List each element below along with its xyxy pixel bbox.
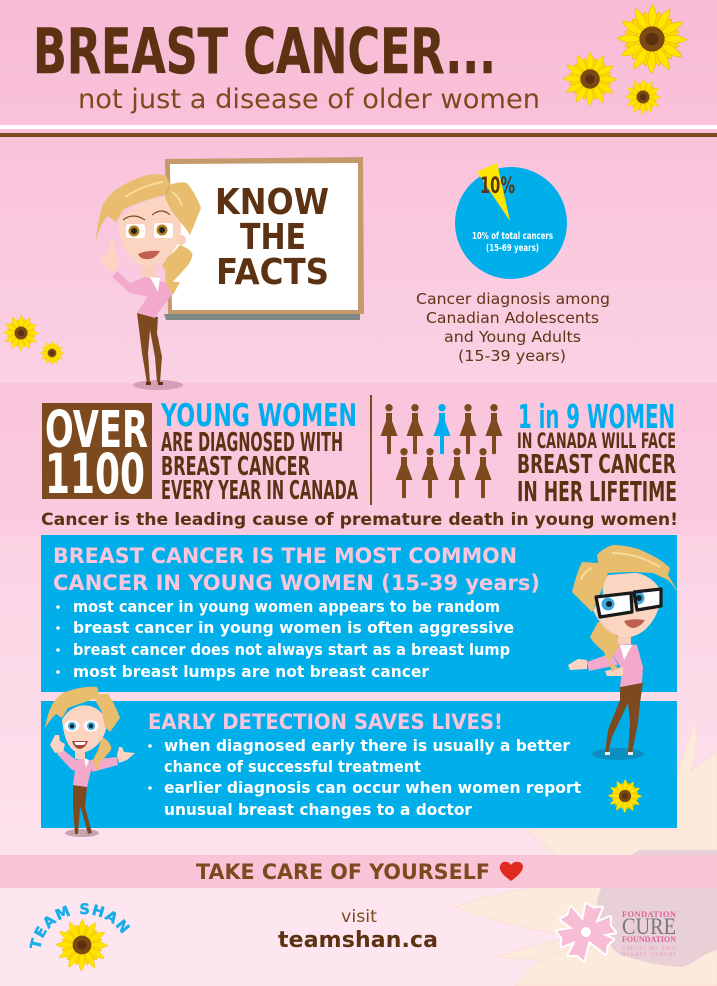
header divider lines	[0, 125, 717, 137]
stat text: young women: ARE DIAGNOSED WITH	[161, 428, 343, 458]
stat: over 1100: 1100	[45, 442, 145, 506]
left sunflowers	[3, 315, 64, 365]
pie chart: 10%: 10% of total cancers	[472, 231, 553, 242]
stat text: young women	[160, 398, 358, 506]
whiteboard heading: KNOW	[215, 182, 329, 223]
band: take care of yourself	[0, 855, 717, 888]
panel bullets: most cancer in young women appears to be random	[73, 597, 500, 616]
panel heading: EARLY DETECTION SAVES LIVES!	[148, 710, 503, 734]
vertical divider	[370, 395, 372, 505]
panel heading: BREAST CANCER IS THE MOST COMMON	[53, 544, 517, 568]
stat: over 1100: OVER	[45, 401, 148, 460]
call to action: visit: visit	[341, 907, 377, 927]
pie caption	[416, 290, 610, 365]
logo: team shan	[29, 903, 130, 971]
panel heading	[53, 544, 540, 595]
subtitle: not just a disease of older women	[78, 84, 540, 115]
logo: team shan: TEAM SHAN	[29, 903, 130, 948]
character: presenter pointing up	[96, 174, 201, 390]
pie caption: (15-39 years)	[458, 347, 566, 365]
icon: heart	[500, 862, 523, 881]
panel bullets: unusual breast changes to a doctor	[164, 800, 472, 819]
whiteboard heading	[215, 182, 329, 293]
panel sunflower	[608, 779, 642, 813]
header sunflowers	[563, 4, 687, 115]
panel bullets	[148, 736, 581, 819]
panel bullets: earlier diagnosis can occur when women report	[164, 778, 581, 797]
panel bullets: when diagnosed early there is usually a better	[164, 736, 570, 755]
band: take care of yourself: TAKE CARE OF YOURSELF	[196, 860, 490, 884]
panel bullets: chance of successful treatment	[164, 757, 421, 776]
logo: cure foundation: breast cancer	[622, 951, 677, 958]
stat: over 1100	[42, 401, 152, 506]
title: BREAST CANCER...	[33, 15, 496, 88]
panel: early detection	[41, 701, 677, 828]
panel bullets: breast cancer does not always start as a breast lump	[73, 640, 510, 659]
pie caption: Canadian Adolescents	[426, 309, 599, 327]
stat text: young women: BREAST CANCER	[161, 452, 310, 482]
logo: cure foundation: FONDATION	[622, 909, 677, 919]
whiteboard: know the facts	[164, 157, 364, 320]
logo: cure foundation: FOUNDATION	[622, 935, 676, 944]
stat text: young women: YOUNG WOMEN	[160, 398, 357, 434]
pie chart: 10%: (15-69 years)	[486, 243, 539, 254]
faded background sunflower	[455, 722, 717, 986]
pie caption: Cancer diagnosis among	[416, 290, 610, 308]
pie caption: and Young Adults	[444, 328, 581, 346]
panel heading: CANCER IN YOUNG WOMEN (15-39 years)	[53, 571, 540, 595]
stat text: 1 in 9 women	[517, 397, 677, 508]
panel: most common cancer	[41, 535, 677, 692]
panel bullets	[56, 597, 514, 681]
panel bullets: most breast lumps are not breast cancer	[73, 662, 429, 681]
call to action: website: teamshan.ca	[278, 928, 438, 953]
whiteboard heading: FACTS	[216, 252, 329, 293]
logo: cure foundation: cancer du sein	[622, 945, 676, 952]
pictogram: 1 in 9 women	[380, 404, 502, 498]
panel bullets: breast cancer in young women is often aggressive	[73, 618, 514, 637]
stat text: young women: EVERY YEAR IN CANADA	[161, 476, 358, 506]
whiteboard heading: THE	[240, 217, 306, 258]
character: woman with glasses	[568, 545, 683, 760]
pie chart: 10%: 10%	[480, 174, 515, 199]
logo: cure foundation	[557, 903, 677, 961]
pie chart: 10%	[455, 163, 567, 279]
character: woman pointing right	[45, 687, 135, 837]
logo: cure foundation: CURE	[622, 914, 676, 939]
statement line: Cancer is the leading cause of premature death in young women!	[41, 510, 678, 530]
